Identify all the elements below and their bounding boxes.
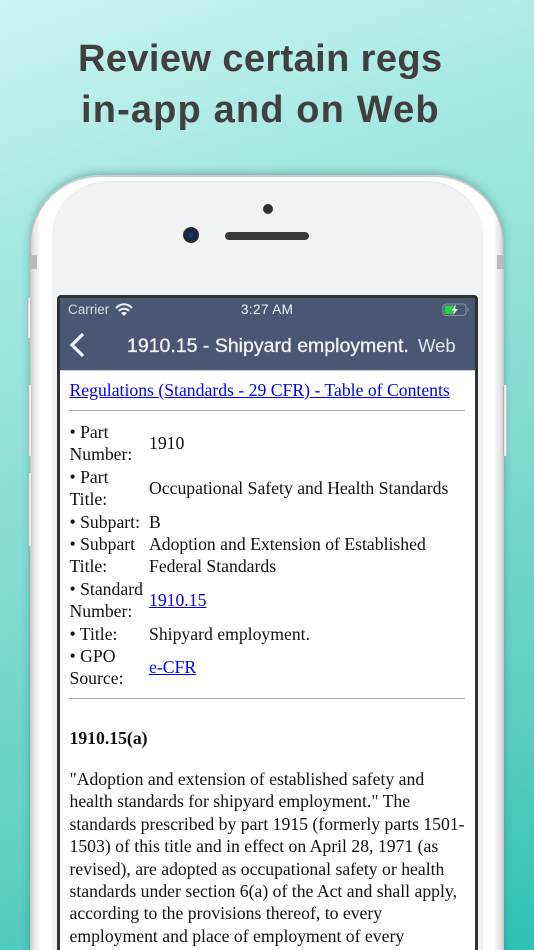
- metadata table: Shipyard employment.: [149, 624, 310, 644]
- metadata table: e-CFR: [149, 657, 196, 677]
- metadata table: Occupational Safety and Health Standards: [149, 478, 448, 498]
- metadata table: • Standard: [70, 579, 143, 599]
- toc link: Regulations (Standards - 29 CFR) - Table of Contents: [70, 380, 450, 400]
- metadata table: Title:: [70, 489, 107, 509]
- body paragraph: according to the provisions thereof, to every: [70, 903, 382, 923]
- title: in-app and on Web: [81, 89, 440, 131]
- side buttons: [27, 298, 507, 546]
- metadata table: B: [149, 512, 161, 532]
- metadata table: Federal Standards: [149, 556, 276, 576]
- antenna bands: [30, 255, 504, 269]
- metadata table: • Subpart: [70, 534, 135, 554]
- body paragraph: 1503) of this title and in effect on April 28, 1971 (as: [70, 836, 438, 856]
- metadata table: Source:: [70, 668, 123, 688]
- phone face: [52, 182, 483, 950]
- metadata table: Adoption and Extension of Established: [149, 534, 426, 554]
- title: [78, 38, 443, 131]
- metadata table: Title:: [70, 556, 107, 576]
- clock: 3:27 AM: [241, 302, 293, 317]
- phone top rim: [30, 175, 504, 265]
- metadata table: Number:: [70, 601, 132, 621]
- metadata table: Number:: [70, 444, 132, 464]
- phone: [26, 169, 508, 950]
- nav bar: [60, 298, 475, 371]
- metadata table: • Title:: [70, 624, 117, 644]
- body paragraph: health standards for shipyard employment." The: [70, 791, 410, 811]
- rule: [69, 410, 465, 411]
- body paragraph: employment and place of employment of every: [70, 926, 404, 946]
- metadata table: • Part: [70, 467, 109, 487]
- metadata table: • GPO: [70, 646, 115, 666]
- metadata table: • Subpart:: [70, 512, 140, 532]
- speaker: [225, 232, 309, 240]
- title: Review certain regs: [78, 38, 443, 80]
- sensor: [263, 204, 273, 214]
- metadata table: 1910.15: [149, 590, 206, 610]
- carrier: Carrier: [68, 302, 109, 317]
- rule: [69, 698, 465, 699]
- nav title: 1910.15 - Shipyard employment.: [127, 335, 409, 357]
- section heading: 1910.15(a): [70, 728, 148, 748]
- metadata table: • Part: [70, 422, 109, 442]
- icon: back chevron: [70, 332, 84, 358]
- screen: [57, 295, 478, 950]
- body paragraph: [70, 769, 465, 946]
- body paragraph: standards under section 6(a) of the Act and shall apply,: [70, 881, 457, 901]
- body paragraph: revised), are adopted as occupational safety or health: [70, 859, 444, 879]
- web button: Web: [418, 335, 456, 356]
- icon: wifi: [115, 303, 133, 316]
- metadata table: 1910: [149, 433, 184, 453]
- metadata table: [70, 422, 448, 688]
- body paragraph: standards prescribed by part 1915 (formerly parts 1501-: [70, 814, 465, 834]
- icon: battery: [442, 304, 468, 316]
- front camera: [183, 227, 199, 243]
- phone body: [30, 175, 504, 950]
- body paragraph: "Adoption and extension of established safety and: [70, 769, 424, 789]
